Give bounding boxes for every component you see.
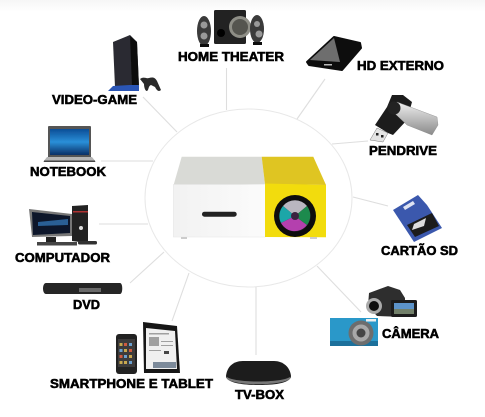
icon: smartphone and tablet xyxy=(116,322,180,374)
icon: pendrive xyxy=(370,95,438,142)
icon: compact camera xyxy=(330,318,378,346)
label: pendrive: PENDRIVE xyxy=(369,144,437,158)
label: external hard drive: HD EXTERNO xyxy=(357,59,444,73)
icon: camcorder xyxy=(366,286,417,317)
icon: tv box xyxy=(226,361,291,385)
icon: notebook xyxy=(43,126,96,162)
icon: home theater xyxy=(197,10,264,47)
icon: external hard drive xyxy=(307,37,361,70)
label: dvd: DVD xyxy=(73,298,100,312)
central circle xyxy=(145,109,352,287)
label: sd card: CARTÃO SD xyxy=(381,243,458,258)
icon: video game console xyxy=(108,35,161,91)
label: smartphone and tablet: SMARTPHONE E TABLET xyxy=(50,377,213,391)
label: home theater: HOME THEATER xyxy=(178,50,284,64)
projector xyxy=(173,157,326,239)
label: notebook: NOTEBOOK xyxy=(30,165,106,179)
label: tv box: TV-BOX xyxy=(235,388,285,402)
icon: sd card xyxy=(393,195,442,242)
label: video game: VIDEO-GAME xyxy=(52,93,137,107)
connector lines xyxy=(99,68,388,355)
label: camera: CÂMERA xyxy=(382,326,439,341)
icon: dvd player xyxy=(43,283,122,294)
icon: desktop computer xyxy=(29,205,97,246)
label: computer: COMPUTADOR xyxy=(15,251,110,265)
